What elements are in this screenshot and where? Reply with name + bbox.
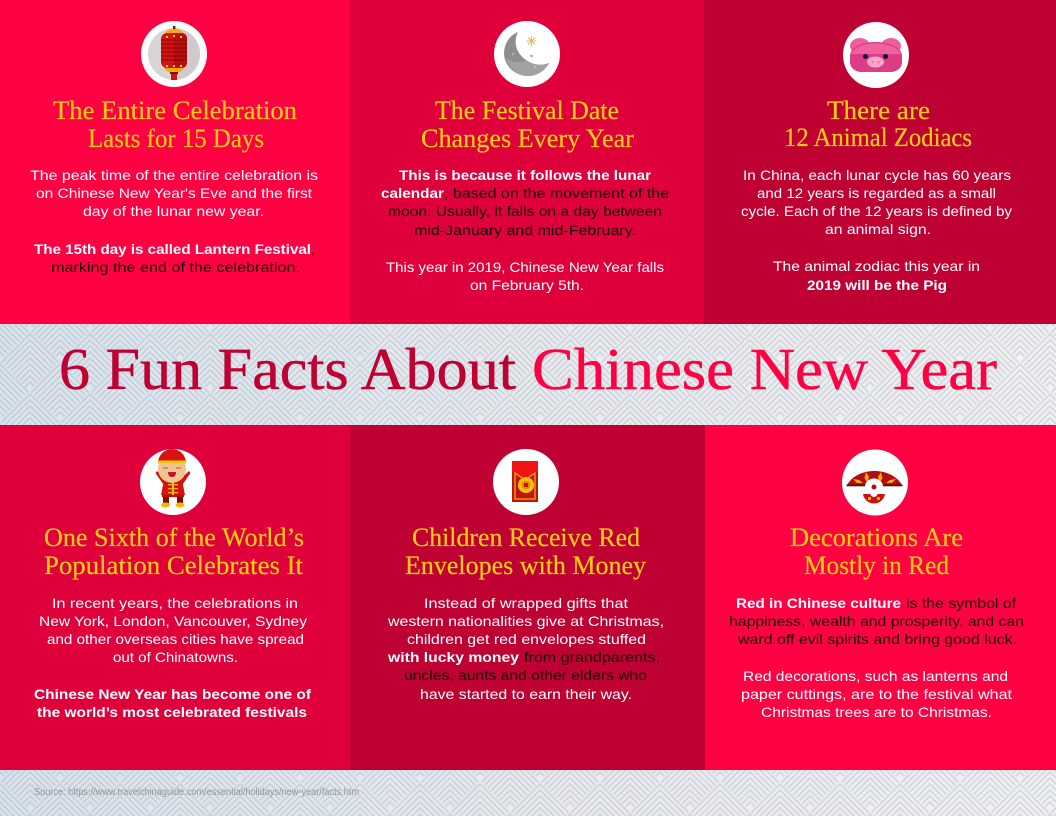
text block: lunar calendar: mid-January and mid-February.: [414, 223, 636, 238]
heading: The Festival Date: The Festival Date: [435, 96, 619, 125]
title: 6 Fun Facts About: [59, 336, 517, 402]
text block: lunar cycle: cycle. Each of the 12 years is defined by: [741, 204, 1012, 219]
heading: The Entire Celebration: The Entire Celebration: [53, 96, 297, 125]
heading: The Entire Celebration: Lasts for 15 Days: [88, 124, 264, 153]
text block: lucky money: western nationalities give at Christmas,: [387, 614, 664, 629]
panel: decorations: [705, 425, 1056, 770]
text block: peak time: day of the lunar new year.: [83, 204, 264, 219]
text block: lucky money: from grandparents,: [524, 650, 660, 665]
text block: lunar cycle: and 12 years is regarded as a small: [757, 186, 996, 201]
text block: peak time: on Chinese New Year's Eve and the first: [36, 186, 312, 201]
panel: festival date: [350, 0, 704, 324]
icon: crescent moon: [494, 21, 560, 87]
heading: The Festival Date: [421, 96, 634, 153]
icon: cheering boy: [140, 449, 206, 515]
text block: lucky money: uncles, aunts and other elders who: [404, 668, 647, 683]
text block: peak time: The 15th day is called Lantern Festival: [34, 242, 311, 257]
text block: red in culture: ward off evil spirits and bring good luck.: [737, 632, 1017, 647]
icon: paper fan: [842, 450, 908, 516]
text block: red in culture: [729, 596, 1024, 720]
footer band: [0, 770, 1056, 816]
text block: lunar cycle: 2019 will be the Pig: [807, 278, 947, 293]
text block: peak time: marking the end of the celebration.: [51, 260, 300, 275]
text block: red in culture: paper cuttings, are to the festival what: [741, 687, 1012, 702]
heading: One Sixth: [44, 523, 304, 580]
heading: Decorations: Mostly in Red: [804, 551, 949, 580]
text block: lunar cycle: In China, each lunar cycle has 60 years: [743, 168, 1011, 183]
heading: One Sixth: Population Celebrates It: [44, 551, 304, 580]
heading: 12 Animal Zodiacs: There are: [827, 96, 930, 125]
text block: lunar cycle: The animal zodiac this year in: [773, 259, 980, 274]
text block: lunar cycle: [741, 168, 1012, 293]
panel: red envelopes: [350, 425, 705, 770]
text block: red in culture: happiness, wealth and prosperity, and can: [729, 614, 1024, 629]
icon: lantern: [141, 21, 207, 87]
text block: lucky money: children get red envelopes stuffed: [407, 632, 646, 647]
text block: lunar calendar: calendar: [381, 186, 445, 201]
title band: [0, 324, 1056, 425]
text block: red in culture: Red in Chinese culture: [736, 596, 901, 611]
text block: overseas: and other overseas cities have spread: [47, 632, 304, 647]
text block: peak time: ,: [311, 242, 315, 257]
text block: red in culture: Red decorations, such as lanterns and: [743, 669, 1008, 684]
heading: 12 Animal Zodiacs: [784, 96, 972, 152]
title: [59, 336, 997, 402]
text block: overseas: Chinese New Year has become one of: [34, 687, 311, 702]
text block: overseas: out of Chinatowns.: [113, 650, 238, 665]
panel: animal zodiacs: [704, 0, 1056, 324]
text block: peak time: [30, 168, 318, 275]
title: Chinese New Year: [532, 336, 997, 402]
heading: One Sixth: One Sixth of the World’s: [44, 523, 304, 552]
text block: lunar calendar: [381, 168, 669, 293]
text block: lunar calendar: on February 5th.: [470, 278, 584, 293]
text block: lunar calendar: This year in 2019, Chinese New Year falls: [386, 260, 664, 275]
text block: lucky money: have started to earn their way.: [420, 687, 632, 702]
text block: red in culture: is the symbol of: [906, 596, 1016, 611]
text block: overseas: In recent years, the celebrations in: [52, 596, 298, 611]
text block: overseas: [34, 596, 311, 720]
heading: Decorations: Decorations Are: [790, 523, 963, 552]
heading: The Festival Date: Changes Every Year: [421, 124, 634, 153]
icon: pig: [843, 22, 909, 88]
text block: peak time: The peak time of the entire celebration is: [30, 168, 318, 183]
source note: Source: https://www.travelchinaguide.com/essential/holidays/new-year/facts.htm: [34, 786, 359, 798]
text block: lunar cycle: .: [947, 278, 951, 293]
panel: population: [0, 425, 350, 770]
text block: lunar calendar: This is because it follows the lunar: [399, 168, 652, 183]
text block: lunar calendar: moon. Usually, it falls on a day between: [388, 204, 662, 219]
icon: red envelope: [493, 449, 559, 515]
text block: red in culture: Christmas trees are to Christmas.: [761, 705, 992, 720]
text block: lucky money: Instead of wrapped gifts that: [424, 596, 628, 611]
heading: red envelopes: Envelopes with Money: [405, 551, 646, 580]
text block: lucky money: with lucky money: [387, 650, 519, 665]
text block: lunar calendar: , based on the movement of the: [444, 186, 669, 201]
heading: Decorations: [790, 523, 963, 580]
heading: red envelopes: Children Receive Red: [412, 523, 640, 552]
text block: overseas: New York, London, Vancouver, Sydney: [39, 614, 307, 629]
text block: lucky money: [387, 596, 664, 702]
text block: overseas: the world’s most celebrated festivals: [37, 705, 307, 720]
text block: lunar cycle: an animal sign.: [825, 222, 931, 237]
heading: The Entire Celebration: [53, 96, 297, 153]
heading: 12 Animal Zodiacs: 12 Animal Zodiacs: [784, 123, 972, 152]
text block: overseas: .: [307, 705, 311, 720]
heading: red envelopes: [405, 523, 646, 580]
panel: 15 days celebration: [0, 0, 350, 324]
